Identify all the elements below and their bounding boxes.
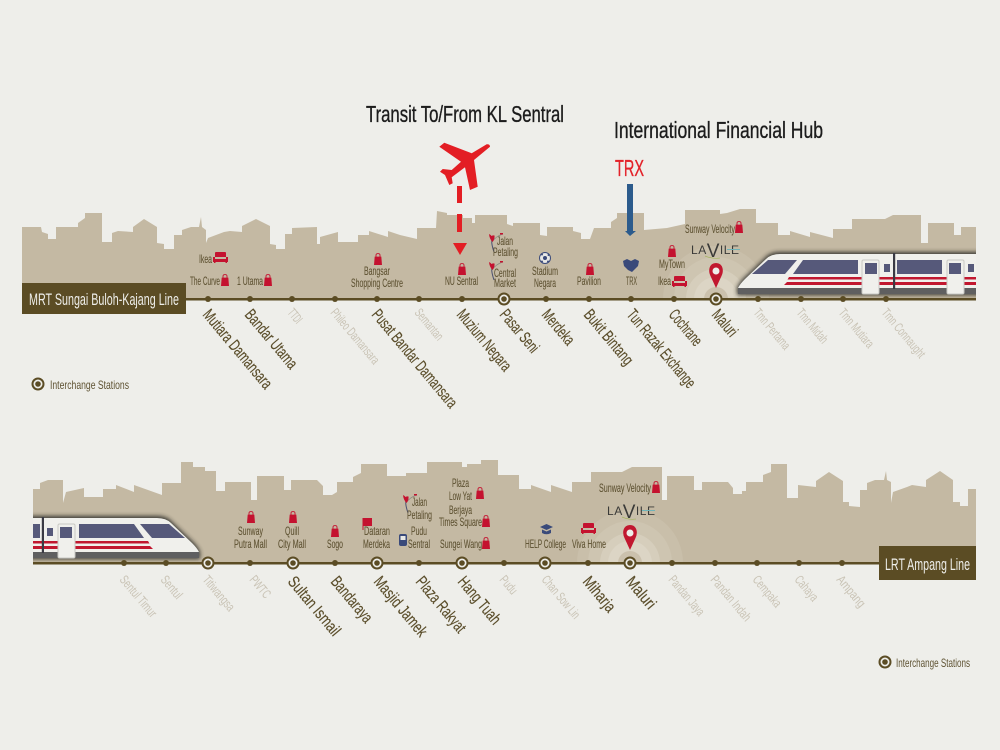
station names: MRT (199, 305, 929, 412)
station names: LRT: Miharja (579, 573, 619, 616)
landmark: Jalan Petaling (489, 233, 518, 259)
line label (879, 546, 976, 580)
landmark: Sungei Wang (440, 537, 490, 551)
landmark: Stadium Negara: Stadium (532, 264, 558, 278)
station names: MRT: Semantan (412, 305, 447, 343)
landmark: Sogo: Sogo (327, 537, 343, 551)
landmark: Pudu Sentral: Pudu (411, 524, 427, 538)
station names: LRT: Cempaka (750, 572, 785, 611)
landmarks: Ikea and The Curve: The Curve (190, 274, 220, 288)
arrow: blue to TRX (625, 184, 636, 236)
station names: LRT: Pandan Jaya (666, 572, 708, 619)
landmark: Viva Home (572, 523, 606, 551)
station names: LRT: Hang Tuah (454, 573, 504, 628)
train: LRT (0, 516, 200, 559)
station names: MRT: TTDI (285, 305, 306, 326)
station markers: LRT (121, 558, 845, 568)
station names: MRT: Pusat Bandar Damansara (368, 306, 461, 412)
station names: MRT: Bandar Utama (241, 306, 301, 373)
landmark: Jalan Petaling (403, 494, 432, 522)
landmark: Sunway Velocity (599, 481, 660, 495)
logo: Lavile (691, 241, 740, 262)
landmark: Berjaya Times Square: Times Square (439, 515, 482, 529)
station names: MRT: Maluri (708, 306, 741, 341)
landmark: Pudu Sentral (399, 524, 430, 551)
line label: MRT Sungai Buloh-Kajang Line (29, 291, 179, 309)
logo: Lavile: LA (691, 243, 706, 257)
heading: transit: Transit To/From KL Sentral (366, 101, 564, 127)
landmark: Quill City Mall (278, 512, 306, 551)
panel: LRT line (0, 460, 976, 641)
logo: Lavile: ILE (720, 243, 739, 257)
landmark: Berjaya Times Square: Berjaya (449, 503, 472, 517)
station names: LRT: Pandan Indah (708, 572, 755, 624)
landmark: Pavilion (577, 264, 601, 288)
logo: Lavile (607, 502, 655, 523)
logo: Lavile: V (623, 502, 636, 523)
landmark: NU Sentral: NU Sentral (445, 274, 478, 288)
landmark: MyTown: MyTown (659, 257, 685, 271)
landmark: Quill City Mall: Quill (285, 524, 299, 538)
landmark: Jalan Petaling: Petaling (407, 508, 432, 522)
landmark: Plaza Low Yat (449, 476, 484, 503)
icon: airplane (439, 143, 490, 190)
landmark: Central Market: Market (494, 276, 516, 290)
landmark: Central Market: Central (494, 266, 516, 280)
station names: MRT: Tmn Pertama (751, 305, 794, 353)
heading: international financial hub: International Financial Hub (614, 117, 823, 143)
landmark: Plaza Low Yat: Plaza (452, 476, 469, 490)
line: LRT track (33, 562, 880, 564)
landmark: Sunway Putra Mall: Putra Mall (234, 537, 267, 551)
station names: MRT: Phileo Damansara (328, 305, 383, 367)
station names: MRT: Cochrane (665, 306, 706, 350)
landmarks: Ikea and The Curve (190, 252, 229, 288)
landmark: Bangsar Shopping Centre (351, 254, 403, 290)
station names: LRT: Pudu (497, 572, 521, 597)
landmark: Dataran Merdeka: Merdeka (363, 537, 390, 551)
legend: interchange stations (32, 378, 129, 392)
station markers: MRT (205, 294, 889, 304)
landmark: Sungei Wang: Sungei Wang (440, 537, 482, 551)
landmark: Ikea: Ikea (658, 274, 671, 288)
legend: interchange stations (880, 656, 970, 670)
landmarks: Ikea and The Curve: Ikea (199, 252, 212, 266)
station names: LRT: Maluri (622, 573, 660, 613)
heading: TRX: TRX (615, 155, 644, 181)
station names: LRT (117, 572, 869, 641)
skyline: LRT (33, 460, 976, 563)
line label (22, 283, 186, 314)
train: MRT (737, 252, 985, 295)
landmark: Central Market (489, 261, 516, 290)
landmark: TRX handshake: TRX (626, 274, 637, 288)
station names: MRT: Mutiara Damansara (199, 306, 276, 393)
landmark: Plaza Low Yat: Low Yat (449, 489, 472, 503)
landmark: Sunway Velocity: Sunway Velocity (685, 222, 735, 236)
landmark: Quill City Mall: City Mall (278, 537, 306, 551)
station names: LRT: Titiwangsa (200, 572, 239, 615)
landmark: Pavilion: Pavilion (577, 274, 601, 288)
station names: MRT: Tmn Mutiara (836, 305, 878, 351)
icon: location pin (709, 263, 723, 288)
station names: LRT: Masjid Jamek (370, 573, 431, 641)
station names: LRT: Sultan Ismail (284, 573, 344, 640)
station names: MRT: Bukit Bintang (580, 306, 637, 369)
landmark: Sunway Velocity: Sunway Velocity (599, 481, 651, 495)
station names: MRT: Pasar Seni (496, 306, 543, 357)
landmark: Dataran Merdeka: Dataran (364, 524, 390, 538)
landmark: Sunway Velocity (685, 222, 743, 236)
landmark: Stadium Negara (532, 252, 558, 290)
landmark: Dataran Merdeka (363, 518, 390, 551)
station names: LRT: Ampang (834, 572, 869, 610)
station names: LRT: PWTC (247, 572, 274, 601)
landmark: Bangsar Shopping Centre: Shopping Centre (351, 276, 403, 290)
skyline: MRT (22, 209, 976, 299)
landmark: NU Sentral (445, 264, 478, 288)
station names: LRT: Cahaya (792, 572, 822, 605)
landmark: Stadium Negara: Negara (534, 276, 556, 290)
location rings: Maluri (674, 257, 758, 298)
landmark: Jalan Petaling: Jalan (412, 495, 427, 509)
station names: LRT: Sentul Timur (117, 572, 161, 621)
icon: location pin (623, 525, 637, 550)
station names: MRT: Merdeka (538, 306, 578, 349)
landmark: Berjaya Times Square (439, 503, 490, 529)
station names: LRT: Sentul (158, 572, 186, 602)
station names: MRT: Tmn Connaught (879, 305, 929, 361)
landmark: Jalan Petaling: Petaling (493, 245, 518, 259)
station names: MRT: Muzium Negara (453, 306, 515, 375)
legend: interchange stations: Interchange Stations (50, 378, 129, 392)
landmark: Sogo (327, 526, 343, 551)
station names: LRT: Bandaraya (327, 573, 376, 627)
panel: MRT line (22, 209, 985, 412)
logo: Lavile: LA (607, 504, 622, 518)
logo: Lavile: ILE (636, 504, 655, 518)
landmark: Jalan Petaling: Jalan (497, 234, 513, 248)
location rings: Maluri (588, 521, 672, 562)
landmark: MyTown (659, 246, 685, 271)
station names: MRT: Tun Razak Exchange (623, 306, 699, 392)
landmark: HELP College: HELP College (525, 537, 566, 551)
station names: MRT: Tmn Midah (794, 305, 832, 346)
landmark: 1 Utama: 1 Utama (237, 274, 263, 288)
landmark: Pudu Sentral: Sentral (408, 537, 430, 551)
landmark: Viva Home: Viva Home (572, 537, 606, 551)
landmark: Sunway Putra Mall: Sunway (238, 524, 263, 538)
landmark: HELP College (525, 524, 566, 551)
landmark: Bangsar Shopping Centre: Bangsar (364, 264, 390, 278)
line: MRT track (186, 298, 976, 300)
logo: Lavile: V (707, 241, 720, 262)
landmark: TRX handshake (623, 259, 639, 288)
landmark: Sunway Putra Mall (234, 512, 267, 551)
station names: LRT: Plaza Rakyat (412, 573, 470, 637)
arrow: dashed red to NU Sentral (453, 186, 467, 255)
station names: LRT: Chan Sow Lin (539, 572, 584, 622)
